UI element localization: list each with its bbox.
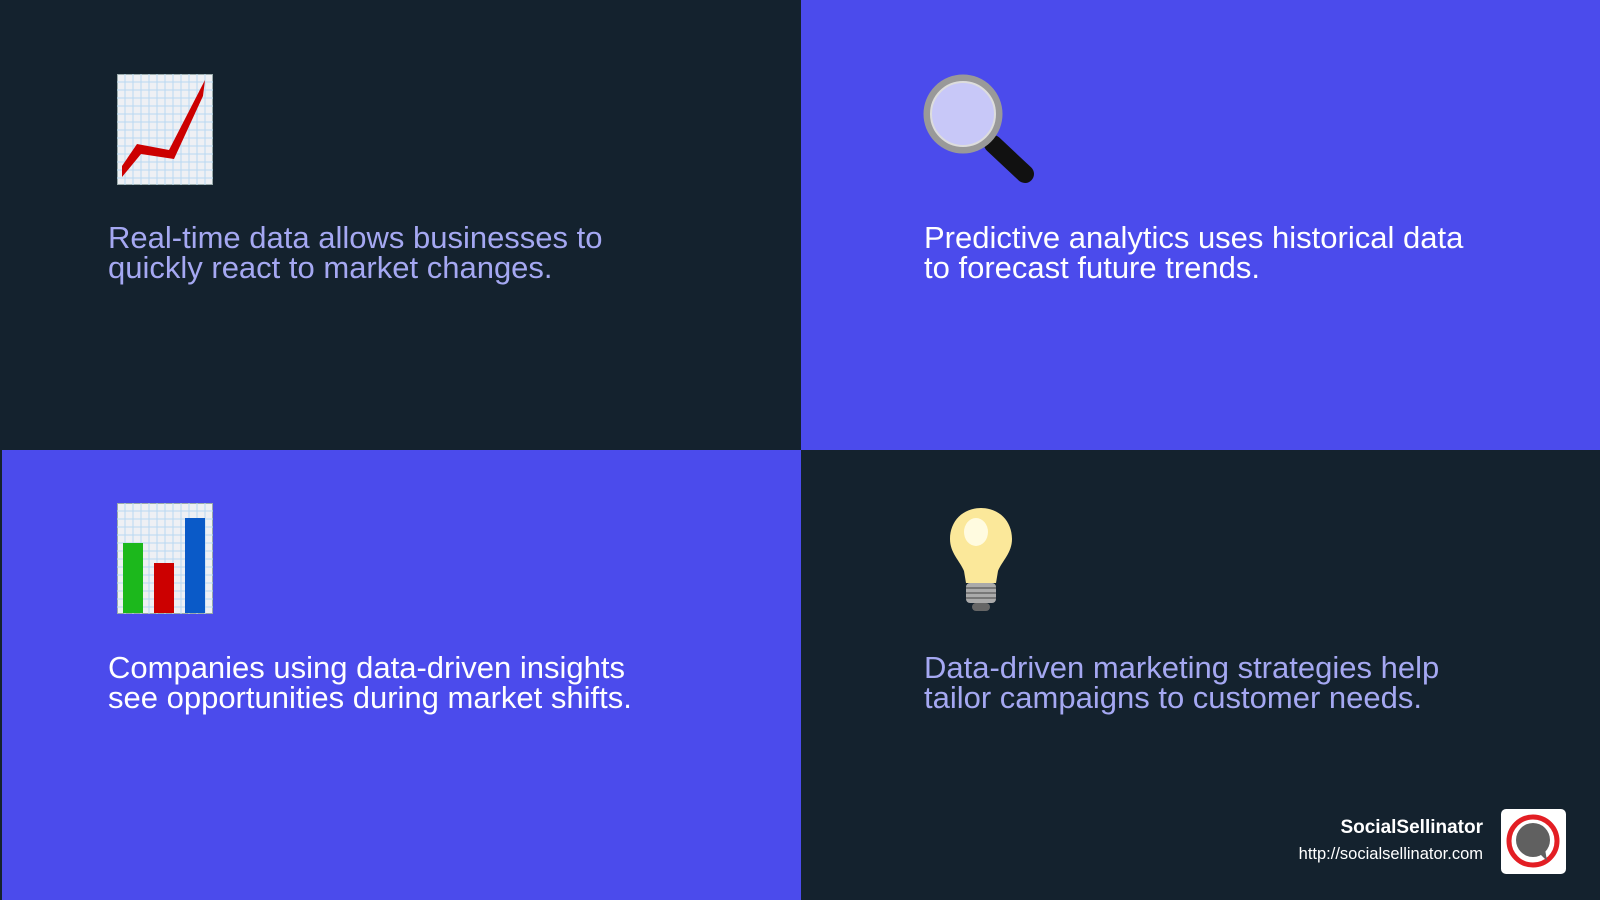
text: companies insights: see opportunities during market shifts. [108,680,632,715]
text: companies insights: Companies using data-driven insights [108,650,625,685]
text: data-driven marketing: tailor campaigns to customer needs. [924,680,1422,715]
brand name: SocialSellinator [1340,817,1483,838]
panel: companies insights [2,450,801,900]
text: companies insights [108,650,632,715]
icon: bar chart [117,503,213,614]
text: real-time data: Real-time data allows businesses to [108,220,603,255]
icon: light bulb [950,508,1012,611]
text: real-time data: quickly react to market changes. [108,250,553,285]
text: data-driven marketing: Data-driven marketing strategies help [924,650,1439,685]
text: data-driven marketing [924,650,1439,715]
brand url: http://socialsellinator.com [1299,845,1483,863]
brand block [1299,809,1566,874]
logo [1501,809,1566,874]
icon: magnifying glass [924,74,1034,183]
icon: line chart [117,74,213,185]
panel: predictive analytics [801,0,1600,450]
text: predictive analytics: to forecast future trends. [924,250,1260,285]
text: predictive analytics: Predictive analytics uses historical data [924,220,1463,255]
panel: data-driven marketing [801,450,1600,900]
text: real-time data [108,220,603,285]
panel: real-time data [2,0,801,450]
text: predictive analytics [924,220,1464,285]
